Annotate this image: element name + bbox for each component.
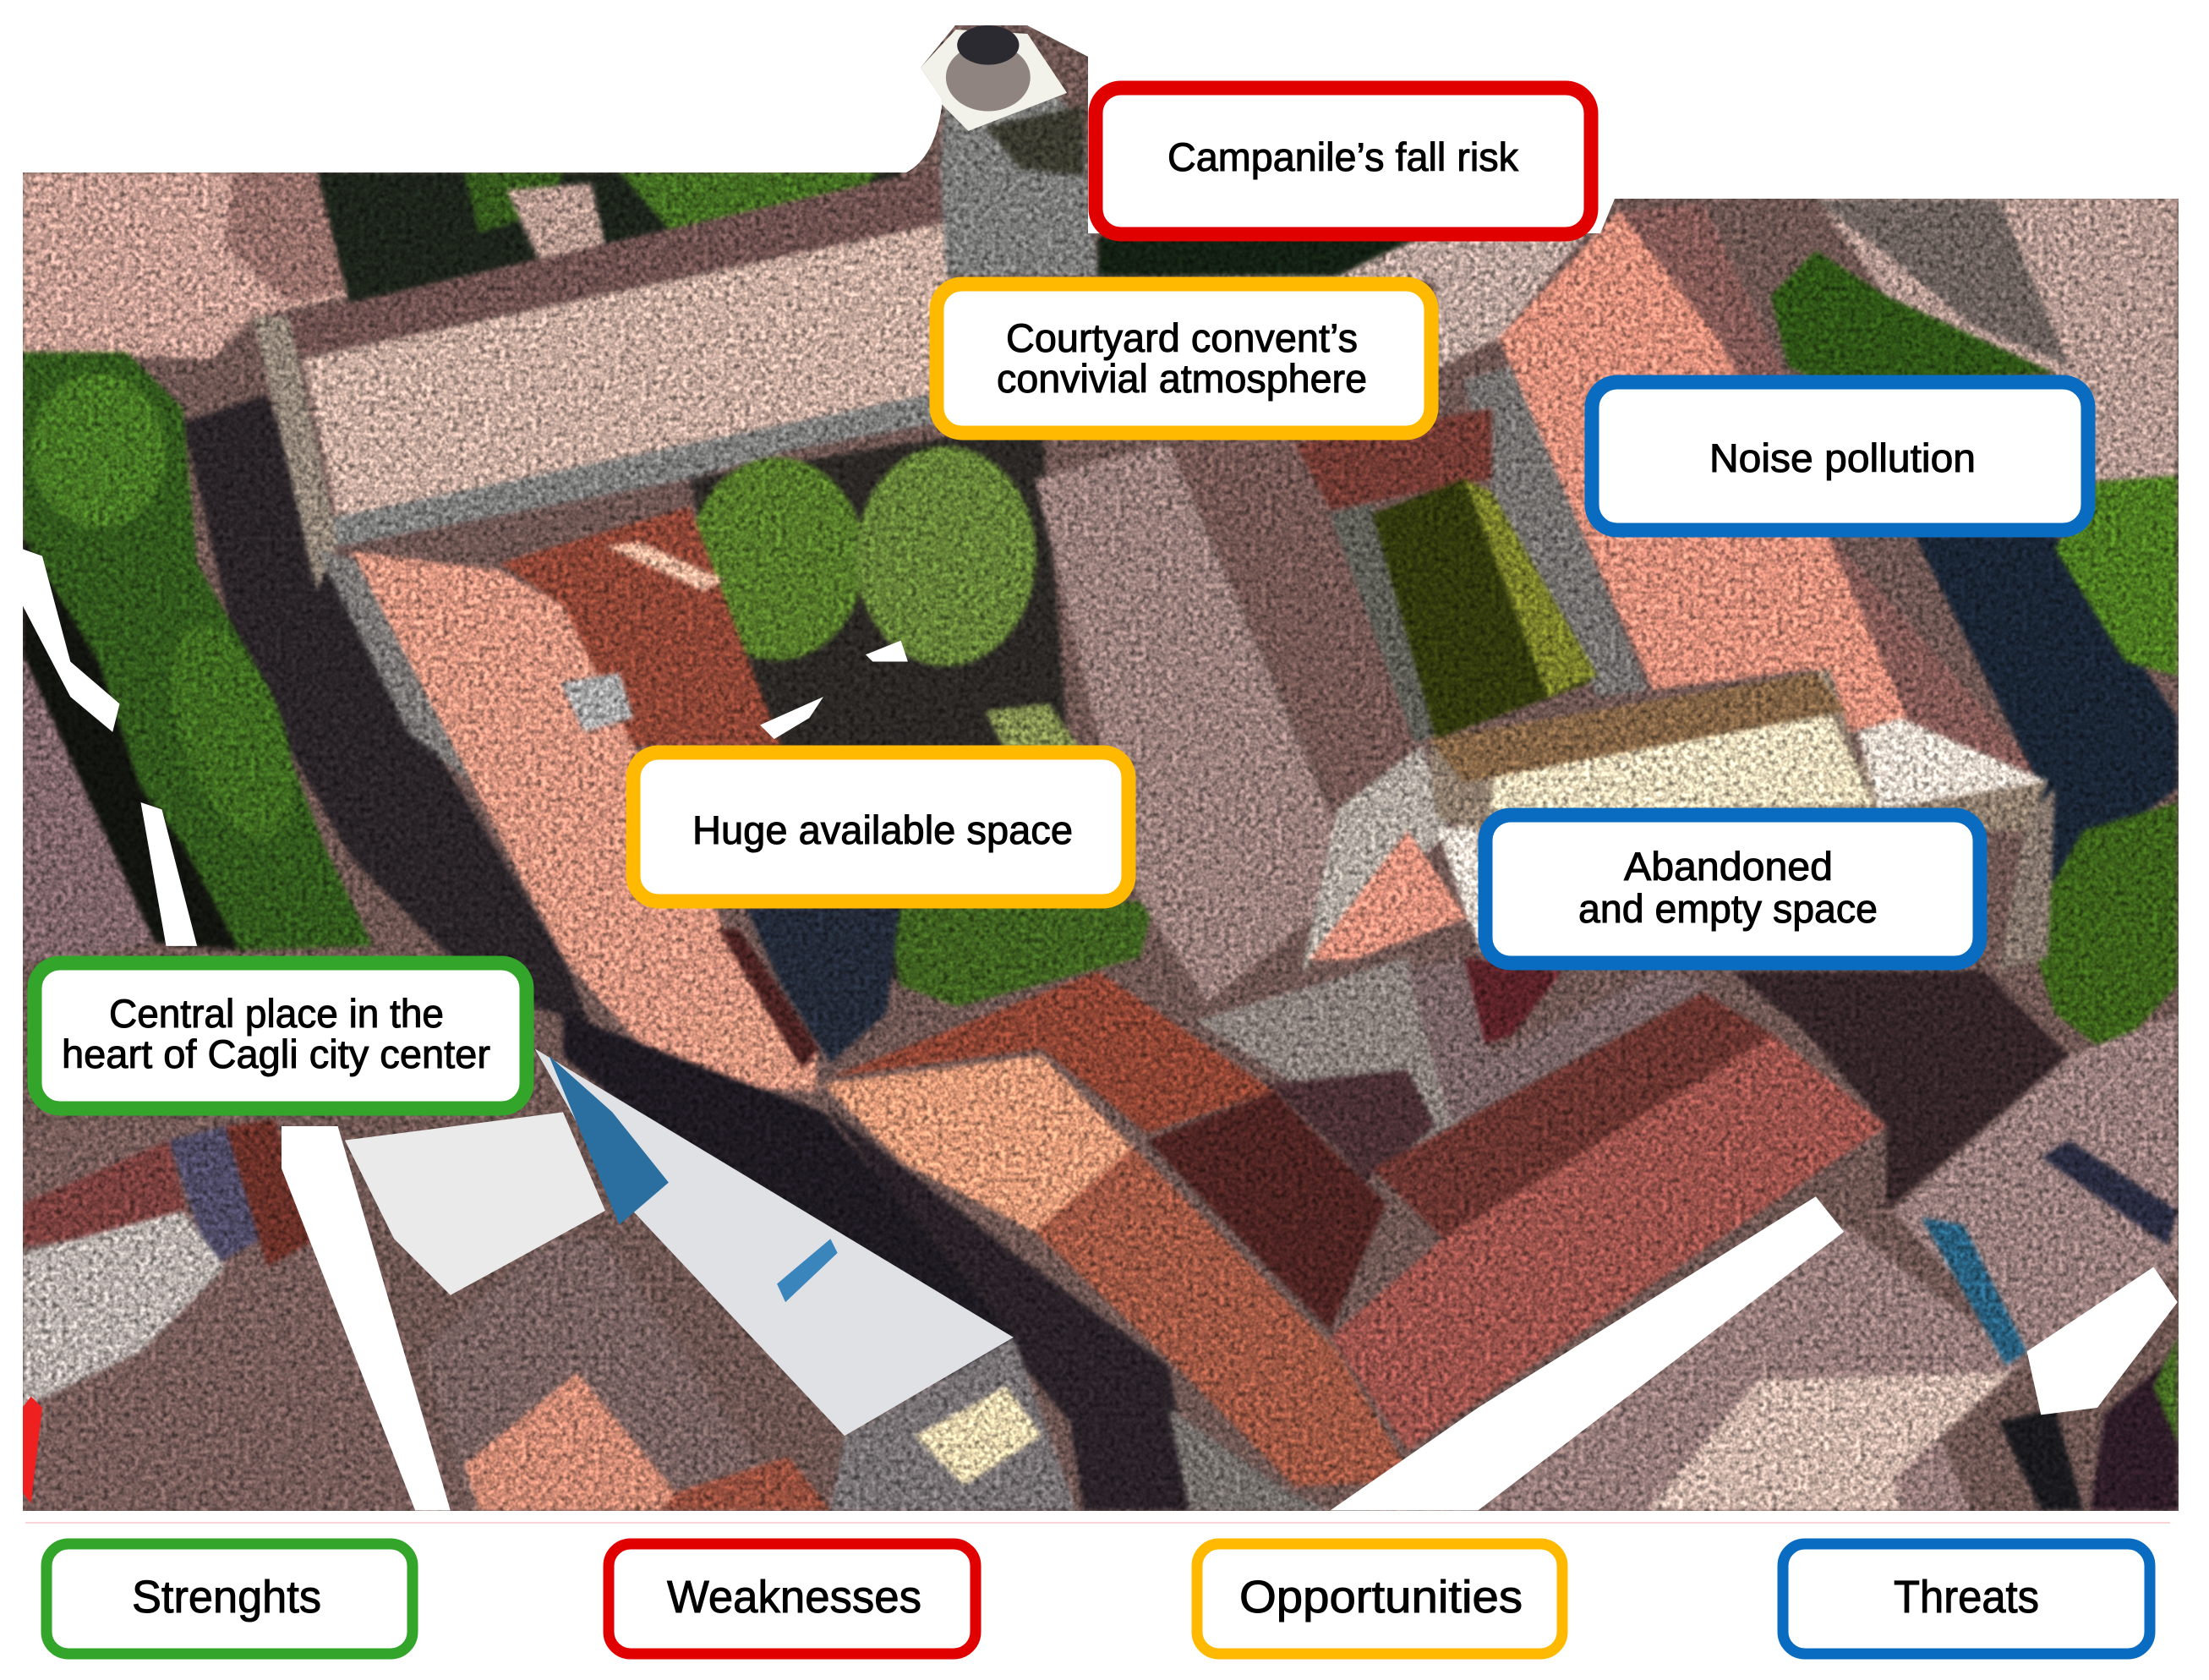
- callout: Abandoned and empty space (threat): and empty space: [1578, 886, 1878, 931]
- callout: Central place in the heart of Cagli city center (strength): Central place in the: [109, 991, 444, 1036]
- central trees and shadows: [690, 423, 1069, 986]
- callout: Courtyard convent's convivial atmosphere (opportunity): Courtyard convent’s: [1006, 315, 1358, 360]
- lower left roofs: [563, 1014, 1077, 1511]
- legend: Weaknesses: Weaknesses: [667, 1572, 921, 1623]
- callout: Courtyard convent's convivial atmosphere (opportunity): convivial atmosphere: [997, 356, 1367, 401]
- left street and wall: [183, 394, 591, 1027]
- callout: Abandoned and empty space (threat): Abandoned: [1624, 844, 1833, 889]
- legend: Strenghts: [46, 1544, 413, 1654]
- central convent roof: [1035, 443, 1337, 1002]
- inner courtyard: [1295, 408, 1492, 510]
- lower right roofs: [1478, 1225, 2027, 1511]
- callout: Central place in the heart of Cagli city center (strength): [35, 963, 527, 1108]
- legend: Opportunities: [1197, 1544, 1562, 1654]
- callout: Noise pollution (threat): Noise pollution: [1709, 435, 1976, 480]
- legend: Threats: [1783, 1544, 2150, 1654]
- lower courtyard: [1196, 957, 1464, 1168]
- top right roofs: [1199, 233, 1589, 370]
- callout: Huge available space (opportunity): Huge available space: [692, 807, 1073, 852]
- middle building: [1429, 669, 2048, 830]
- callout: Campanile's fall risk (weakness): [1096, 88, 1591, 234]
- upper left: [23, 172, 352, 359]
- bell tower: [938, 96, 1099, 278]
- red roof complex: [823, 1105, 1196, 1511]
- callout: Courtyard convent's convivial atmosphere (opportunity): [937, 284, 1431, 433]
- callout: Campanile's fall risk (weakness): Campanile’s fall risk: [1167, 134, 1518, 179]
- thin pink rule below photo: [25, 1522, 2170, 1524]
- callout: Abandoned and empty space (threat): [1485, 815, 1980, 963]
- legend: Opportunities: Opportunities: [1239, 1572, 1523, 1623]
- legend: Threats: Threats: [1894, 1572, 2039, 1623]
- legend: Strenghts: Strenghts: [132, 1572, 321, 1623]
- callout: Noise pollution (threat): [1592, 382, 2088, 530]
- callout: Central place in the heart of Cagli city center (strength): heart of Cagli city center: [62, 1032, 490, 1076]
- legend: Weaknesses: [609, 1544, 976, 1654]
- pink roof and red strip: [500, 506, 781, 746]
- callout: Huge available space (opportunity): [633, 752, 1129, 901]
